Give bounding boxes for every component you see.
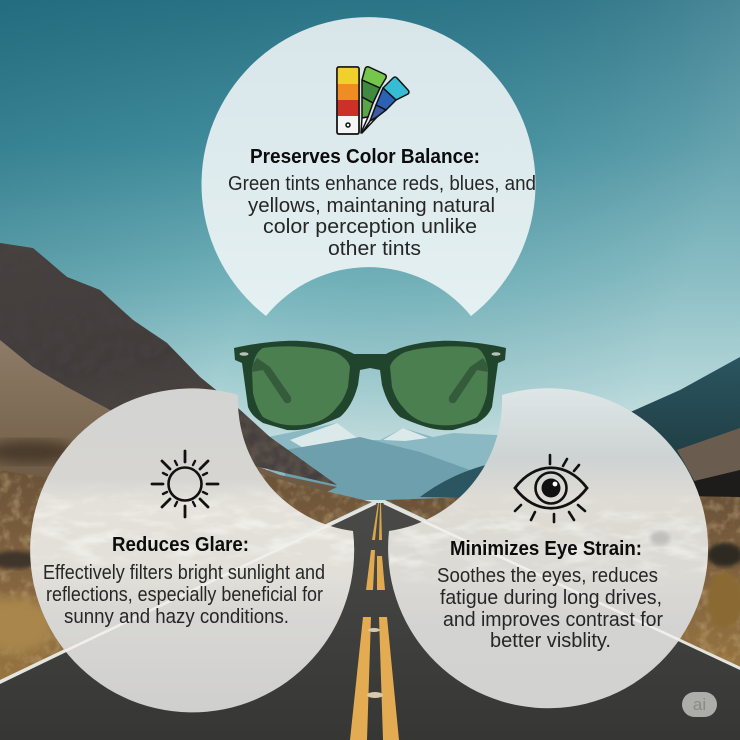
ai badge: [682, 692, 717, 717]
panel: reduces glare: [30, 388, 354, 712]
icon: sun: [152, 451, 218, 517]
text block: [228, 173, 536, 260]
sunglasses: [234, 341, 506, 430]
text block: fatigue during long drives,: [440, 587, 662, 609]
left lens: [252, 346, 350, 425]
text block: Green tints enhance reds, blues, and: [228, 173, 536, 195]
background: right mountain: [600, 357, 740, 500]
icon: color swatch fan: [337, 67, 409, 134]
text block: reflections, especially beneficial for: [46, 584, 323, 606]
text block: color perception unlike: [263, 216, 477, 238]
text block: [437, 565, 663, 652]
text block: sunny and hazy conditions.: [64, 606, 289, 628]
ai badge: ai: [693, 695, 706, 714]
heading: Preserves Color Balance:: [250, 146, 480, 168]
heading: Reduces Glare:: [112, 534, 249, 556]
text block: other tints: [328, 238, 421, 260]
rivets: [240, 352, 248, 356]
icon: eye: [515, 455, 587, 522]
text block: Soothes the eyes, reduces: [437, 565, 658, 587]
background: road: [0, 503, 740, 740]
background: left mountain: [0, 243, 337, 492]
text block: yellows, maintaning natural: [248, 195, 495, 217]
text block: better visblity.: [490, 630, 611, 652]
text block: Effectively filters bright sunlight and: [43, 562, 325, 584]
right lens: [390, 346, 488, 425]
background: desert ground: [0, 465, 740, 685]
temple arms: [252, 358, 291, 403]
panel: preserves color balance: [202, 17, 536, 316]
text block: [43, 562, 325, 628]
text block: and improves contrast for: [443, 609, 663, 631]
panel: minimizes eye strain: [384, 388, 740, 708]
background: distant blue mountains: [268, 423, 640, 500]
heading: Minimizes Eye Strain:: [450, 538, 642, 560]
